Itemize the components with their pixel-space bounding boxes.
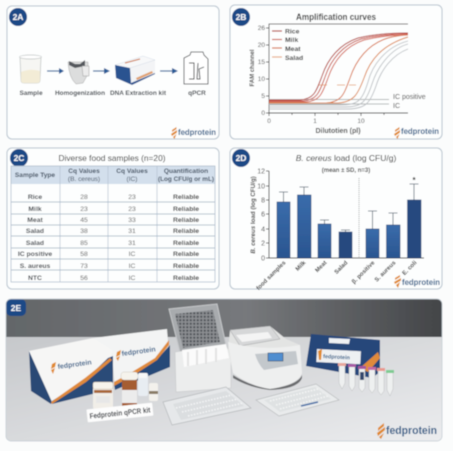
product label: Fedprotein qPCR kit xyxy=(89,405,151,421)
arrow xyxy=(93,68,110,74)
x labels: Salad xyxy=(334,260,350,276)
table rows: 31 xyxy=(128,228,136,235)
red and orange curves xyxy=(269,33,408,103)
panel 2E: product photo xyxy=(6,299,442,441)
legend xyxy=(272,28,303,62)
curve labels: IC xyxy=(393,103,400,110)
plate right xyxy=(256,384,339,416)
table title: Diverse food samples (n=20) xyxy=(58,153,166,163)
badge 2B: 2B xyxy=(236,12,246,22)
table rows: IC xyxy=(129,263,135,270)
x labels: Milk xyxy=(295,260,308,273)
table rows: Reliable xyxy=(173,206,199,213)
x labels: β. positive xyxy=(351,260,377,285)
table rows: 45 xyxy=(80,217,88,224)
table header: Cq Values xyxy=(68,168,100,175)
panel 2D: bar chart xyxy=(230,148,442,292)
bar chart: 2 xyxy=(261,240,265,248)
table rows: 31 xyxy=(128,240,136,247)
badge 2C xyxy=(10,149,28,167)
line chart: 26 xyxy=(258,25,265,32)
label row: DNA Extraction kit xyxy=(110,90,167,97)
icon: DNA extraction kit box xyxy=(115,56,155,85)
x labels: food samples xyxy=(256,260,288,292)
logo: fedprotein xyxy=(394,275,440,288)
table header: Sample Type xyxy=(15,172,55,179)
bars xyxy=(277,195,421,258)
line chart: 15 xyxy=(258,59,265,66)
logo: fedprotein: fedprotein xyxy=(178,128,216,137)
x labels xyxy=(256,260,419,292)
panel 2C: table xyxy=(7,148,219,289)
table rows: 23 xyxy=(80,206,88,213)
logo: fedprotein xyxy=(394,127,439,139)
table rows: 23 xyxy=(128,194,136,201)
line chart: 20 xyxy=(258,42,265,49)
badge 2A xyxy=(9,8,27,26)
kit box 2 xyxy=(93,329,170,390)
badge 2E: 2E xyxy=(11,303,22,313)
badge 2E xyxy=(6,299,26,316)
bar chart: 10 xyxy=(257,184,265,190)
table rows: Salad xyxy=(26,240,44,247)
legend: Milk xyxy=(285,37,298,44)
arrow xyxy=(160,68,178,74)
thermal cycler xyxy=(228,326,302,390)
bar chart: 6 xyxy=(261,212,265,218)
tip box xyxy=(169,304,231,392)
line chart xyxy=(250,24,426,135)
curve labels: IC positive xyxy=(393,94,426,101)
legend: Meat xyxy=(285,46,301,53)
table rows: IC xyxy=(129,275,135,282)
table rows: 28 xyxy=(80,194,88,201)
kit box 1 xyxy=(29,338,113,404)
chart title: Amplification curves xyxy=(296,12,376,22)
table header: (B. cereus) xyxy=(68,176,100,183)
arrow xyxy=(47,68,64,74)
logo: fedprotein: fedprotein xyxy=(401,127,439,136)
table rows: 23 xyxy=(128,206,136,213)
table rows: Reliable xyxy=(173,194,199,201)
logo: fedprotein xyxy=(171,127,216,139)
chart title xyxy=(296,153,396,174)
table rows: IC positive xyxy=(18,251,52,258)
label row xyxy=(19,90,206,97)
panel 2B: amplification curves xyxy=(230,5,442,139)
table rows: 58 xyxy=(80,251,88,258)
table rows: 56 xyxy=(80,275,88,282)
table rows: Reliable xyxy=(173,263,199,270)
bar chart: 8 xyxy=(261,198,265,204)
icon: sample beaker xyxy=(20,55,42,83)
table rows: Milk xyxy=(28,206,42,213)
badge 2A: 2A xyxy=(13,12,23,22)
table rows: Rice xyxy=(28,194,42,201)
table header: Quantification xyxy=(164,168,208,175)
table rows: Reliable xyxy=(173,217,199,224)
table rows: 38 xyxy=(80,228,88,235)
kit box 1: fedprotein xyxy=(57,359,92,371)
label row: Homogenization xyxy=(55,90,105,97)
bar chart xyxy=(250,168,424,292)
kit box 2: fedprotein xyxy=(121,346,156,358)
badge 2D: 2D xyxy=(236,153,246,163)
x labels: E. coli xyxy=(402,260,419,277)
table rows: NTC xyxy=(28,275,42,282)
curve labels xyxy=(393,94,426,110)
line chart: 1 xyxy=(313,118,317,125)
line chart: Dilutotien (pl) xyxy=(315,128,361,135)
table header xyxy=(15,168,214,183)
logo: fedprotein: fedprotein xyxy=(386,425,437,437)
panel 2A: workflow xyxy=(7,6,219,139)
table header: Cq Values xyxy=(116,168,148,175)
table rows: 33 xyxy=(128,217,136,224)
table rows: Meat xyxy=(27,217,43,224)
badge 2D xyxy=(232,149,250,167)
table rows: Reliable xyxy=(173,275,199,282)
table header: (IC) xyxy=(126,176,138,183)
table rows: 73 xyxy=(80,263,88,270)
icon: homogenizer xyxy=(68,60,89,84)
plate left xyxy=(163,387,251,425)
kit box 3: fedprotein xyxy=(323,354,351,361)
table header: (Log CFU/g or mL) xyxy=(158,176,214,183)
table rows: IC xyxy=(129,251,135,258)
line chart: 10 xyxy=(258,76,265,83)
bar chart: 12 xyxy=(257,168,265,176)
bar chart: 4 xyxy=(261,226,265,234)
logo: fedprotein: fedprotein xyxy=(402,278,440,287)
table rows: Reliable xyxy=(173,251,199,258)
badge 2C: 2C xyxy=(14,153,24,163)
line chart: 0 xyxy=(267,118,271,125)
bar chart: 0 xyxy=(261,256,265,262)
line chart: 5 xyxy=(261,93,265,100)
reagent tubes xyxy=(338,363,394,396)
chart title: B. cereus load (log CFU/g) xyxy=(296,153,396,163)
logo: fedprotein xyxy=(377,423,437,439)
badge 2B xyxy=(232,8,250,26)
line chart: 10 xyxy=(357,118,365,125)
chart title: (mean ± SD, n=3) xyxy=(322,168,370,174)
table xyxy=(11,166,215,282)
table rows xyxy=(18,194,199,282)
bottles and vials xyxy=(93,372,158,410)
gray IC curves xyxy=(269,41,408,109)
bar chart: * xyxy=(412,176,416,185)
table rows: S. aureus xyxy=(20,263,51,270)
legend: Rice xyxy=(285,28,300,36)
y axis title: B. cereus load (log CFU/g) xyxy=(250,176,257,254)
kit box 3 xyxy=(306,334,380,378)
axis titles: FAM channel xyxy=(250,49,256,87)
label row: Sample xyxy=(19,90,43,97)
table rows: Reliable xyxy=(173,228,199,235)
table rows: Salad xyxy=(26,228,44,235)
x labels: S. aureus xyxy=(374,260,398,284)
line chart: 0 xyxy=(261,110,265,117)
legend: Salad xyxy=(285,55,303,62)
icon: qPCR instrument xyxy=(184,52,208,84)
label row: qPCR xyxy=(188,90,206,97)
table rows: 85 xyxy=(80,240,88,247)
table rows: Reliable xyxy=(173,240,199,247)
x labels: Meat xyxy=(315,260,328,274)
error bars xyxy=(279,184,418,232)
